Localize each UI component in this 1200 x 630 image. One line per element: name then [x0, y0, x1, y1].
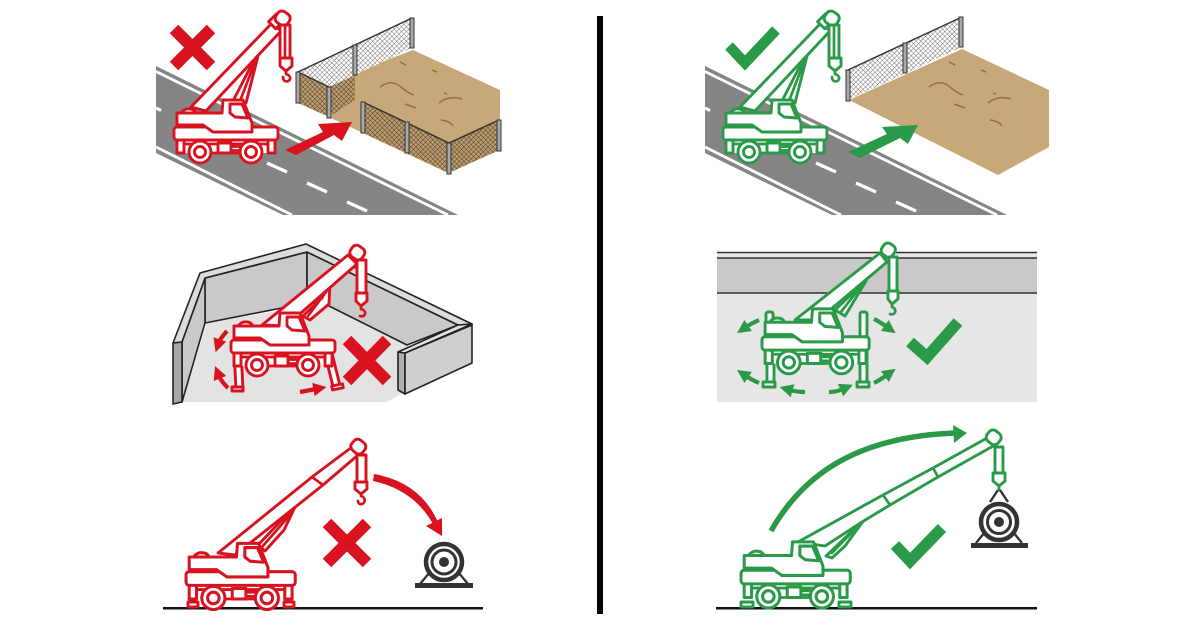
crane: [723, 9, 841, 163]
crane with outriggers: [231, 243, 367, 391]
panel: right bottom, long boom reaches load: [716, 425, 1037, 610]
panel: right middle, open clear area: [717, 241, 1037, 402]
fence: [846, 17, 963, 101]
icon: cable reel: [415, 544, 473, 588]
outward arrows: [746, 319, 887, 392]
center divider: [597, 16, 603, 614]
dirt site: [331, 50, 500, 173]
panel: wrong middle, cramped walled area: [173, 243, 472, 404]
icon: green check: [895, 528, 942, 561]
crane: [174, 9, 292, 163]
icon: cable reel on hook: [971, 490, 1028, 548]
fence: back and side: [296, 18, 414, 118]
icon: red cross: [327, 523, 367, 563]
outward arrows: [219, 331, 316, 392]
panel: wrong bottom, load out of reach: [163, 437, 483, 610]
crane: [186, 437, 368, 610]
icon: red cross: [174, 29, 211, 66]
panel: right top, crane on road with site fence behind: [705, 9, 1049, 215]
ground line: [716, 607, 1037, 610]
floor and wall: [717, 252, 1037, 402]
icon: green check: [729, 30, 776, 63]
road: [705, 66, 1007, 215]
crane with outriggers: [762, 241, 898, 387]
arrow: curved red reach: [373, 474, 442, 536]
arrow: curved green reach: [771, 425, 967, 531]
walls: [173, 244, 472, 404]
dirt site: [849, 49, 1049, 175]
road: [156, 66, 458, 215]
floor: [182, 303, 408, 402]
icon: green check: [910, 322, 958, 357]
ground line: [163, 607, 483, 610]
fence: front: [361, 102, 501, 174]
arrow: green to site: [848, 125, 918, 158]
crane: [741, 428, 1005, 608]
arrow: red to site: [285, 122, 352, 155]
icon: red cross: [347, 340, 387, 381]
panel: wrong top, crane on road with fenced site: [156, 9, 501, 215]
